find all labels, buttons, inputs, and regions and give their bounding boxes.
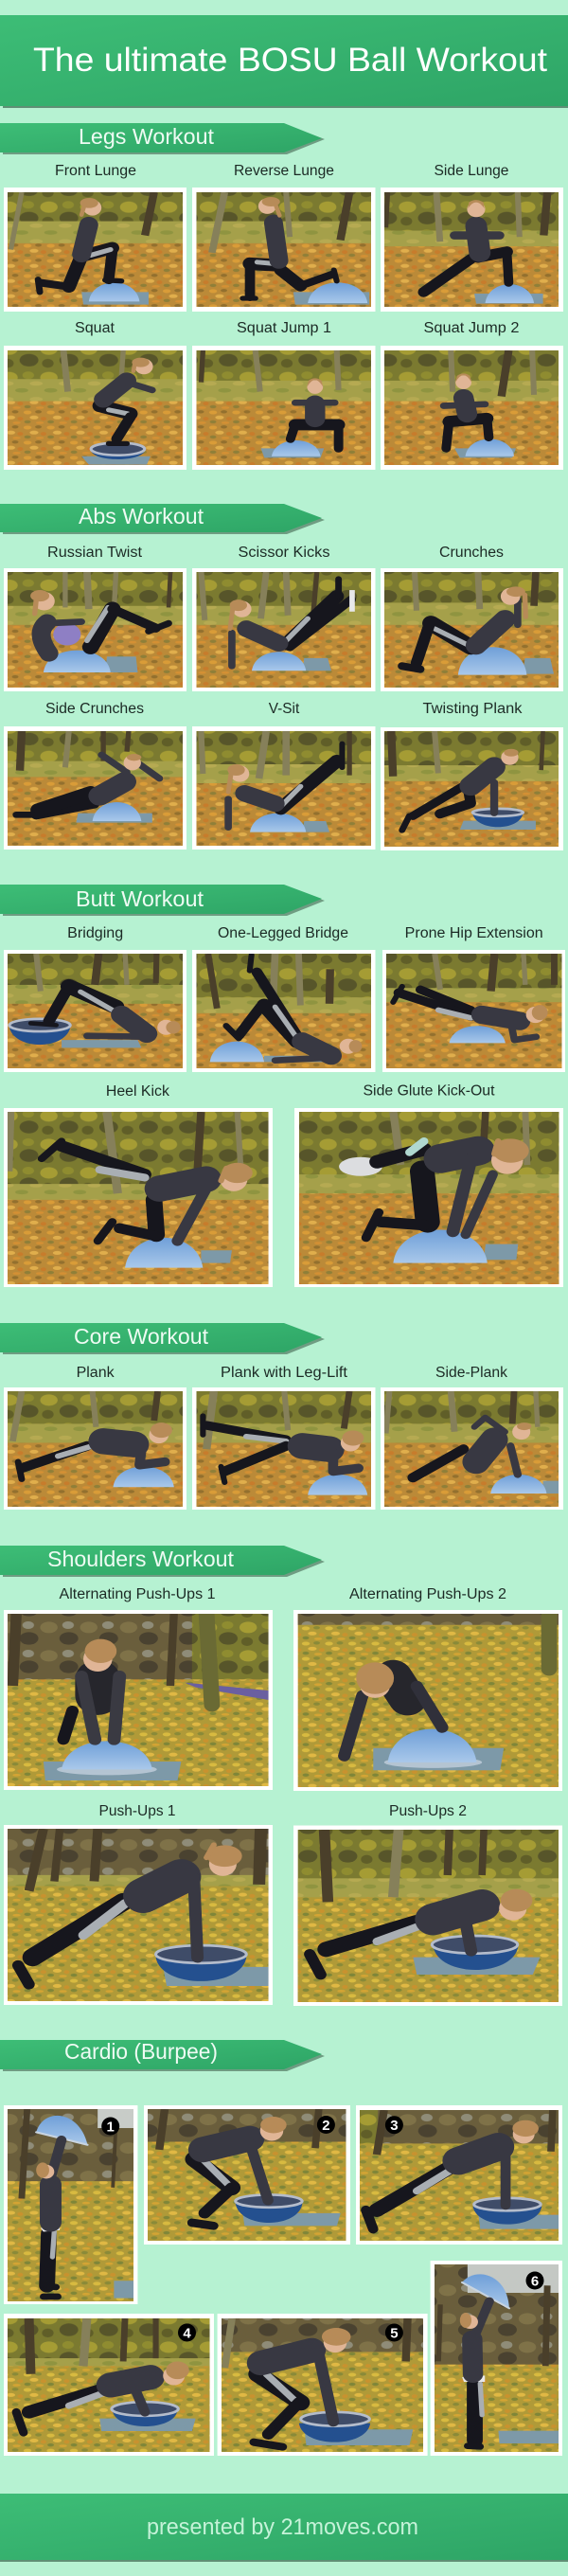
photo: Squat Jump 1 <box>192 346 375 470</box>
badge: 2: 2 <box>322 2118 330 2134</box>
heading: Core Workout: Core Workout <box>74 1324 209 1349</box>
photo: Alternating Push-Ups 1 <box>4 1610 273 1790</box>
caption: Twisting Plank <box>422 701 523 717</box>
heading: Butt Workout <box>0 885 325 916</box>
title banner <box>0 15 568 108</box>
badge: 4 <box>178 2324 196 2341</box>
caption: Bridging <box>67 925 123 941</box>
badge: 5: 5 <box>390 2326 399 2341</box>
caption: Alternating Push-Ups 2 <box>349 1586 506 1602</box>
photo: Burpee step 2 <box>144 2105 350 2245</box>
badge: 6 <box>526 2271 543 2290</box>
caption: Squat Jump 1 <box>237 320 331 336</box>
photo: Alternating Push-Ups 2 <box>293 1610 562 1791</box>
badge: 3: 3 <box>390 2118 399 2134</box>
caption: Plank <box>77 1365 115 1381</box>
caption: Side-Plank <box>435 1365 507 1381</box>
heading: Core Workout <box>0 1323 325 1354</box>
heading: Cardio (Burpee): Cardio (Burpee) <box>64 2039 218 2064</box>
caption: Reverse Lunge <box>234 163 334 179</box>
badge: 3 <box>385 2116 403 2134</box>
photo: Twisting Plank <box>381 727 563 850</box>
panel: Shoulders Workout <box>0 1546 562 2006</box>
photo: Burpee step 3 <box>356 2105 562 2245</box>
heading: Legs Workout: Legs Workout <box>79 124 215 149</box>
panel: Butt Workout <box>0 885 565 1287</box>
badge: 4: 4 <box>183 2326 191 2341</box>
photo: Bridging <box>4 950 186 1072</box>
caption: Alternating Push-Ups 1 <box>59 1586 216 1602</box>
photo: Burpee step 1 <box>4 2105 137 2304</box>
photo: Side Crunches <box>4 726 186 850</box>
panel: Core Workout <box>0 1323 563 1510</box>
caption: Squat <box>75 320 115 336</box>
panel: Abs Workout <box>0 504 563 850</box>
badge: 2 <box>317 2116 335 2134</box>
badge: 6: 6 <box>531 2273 539 2290</box>
caption: Prone Hip Extension <box>405 925 543 941</box>
caption: Side Glute Kick-Out <box>364 1083 495 1099</box>
footer banner <box>0 2494 568 2562</box>
photo: Push-Ups 1 <box>4 1825 273 2005</box>
photo: Front Lunge <box>4 188 186 312</box>
photo: Side Glute Kick-Out <box>294 1108 563 1287</box>
photo: Push-Ups 2 <box>293 1826 562 2006</box>
photo: V-Sit <box>192 726 375 850</box>
caption: Side Crunches <box>45 701 144 717</box>
heading: Cardio (Burpee) <box>0 2039 325 2071</box>
photo: Side-Plank <box>381 1387 563 1510</box>
heading: Legs Workout <box>0 123 325 154</box>
heading: Shoulders Workout: Shoulders Workout <box>47 1547 235 1571</box>
badge: 1 <box>101 2118 119 2135</box>
title: The ultimate BOSU Ball Workout <box>33 42 547 79</box>
badge: 5 <box>385 2324 403 2341</box>
photo: Prone Hip Extension <box>382 950 565 1072</box>
photo: Plank with Leg-Lift <box>192 1387 375 1510</box>
photo: Crunches <box>381 568 563 691</box>
photo: Heel Kick <box>4 1108 273 1287</box>
caption: Heel Kick <box>106 1083 169 1100</box>
caption: Squat Jump 2 <box>424 320 519 336</box>
photo: Plank <box>4 1387 186 1510</box>
caption: Crunches <box>439 545 504 561</box>
heading: Shoulders Workout <box>0 1546 325 1577</box>
photo: Burpee step 4 <box>4 2314 214 2456</box>
caption: Plank with Leg-Lift <box>221 1365 348 1381</box>
heading: Abs Workout <box>0 504 325 534</box>
caption: Push-Ups 1 <box>98 1803 176 1819</box>
photo: Squat Jump 2 <box>381 346 563 470</box>
photo: Squat <box>4 346 186 470</box>
caption: One-Legged Bridge <box>218 925 348 941</box>
photo: Reverse Lunge <box>192 188 375 312</box>
photo: Scissor Kicks <box>192 568 375 691</box>
heading: Butt Workout: Butt Workout <box>76 886 204 911</box>
panel: Legs Workout <box>0 123 563 470</box>
caption: Russian Twist <box>47 545 143 561</box>
footer text: presented by 21moves.com <box>147 2514 418 2540</box>
badge: 1: 1 <box>107 2120 115 2135</box>
photo: One-Legged Bridge <box>192 950 375 1072</box>
heading: Abs Workout: Abs Workout <box>79 504 204 528</box>
photo: Russian Twist <box>4 568 186 691</box>
photo: Side Lunge <box>381 188 563 312</box>
panel: Cardio (Burpee) <box>0 2039 562 2456</box>
caption: V-Sit <box>269 701 300 717</box>
photo: Burpee step 5 <box>218 2314 428 2456</box>
caption: Scissor Kicks <box>239 545 330 561</box>
caption: Side Lunge <box>434 163 509 179</box>
caption: Front Lunge <box>55 163 136 179</box>
photo: Burpee step 6 <box>431 2261 562 2456</box>
caption: Push-Ups 2 <box>389 1803 467 1819</box>
